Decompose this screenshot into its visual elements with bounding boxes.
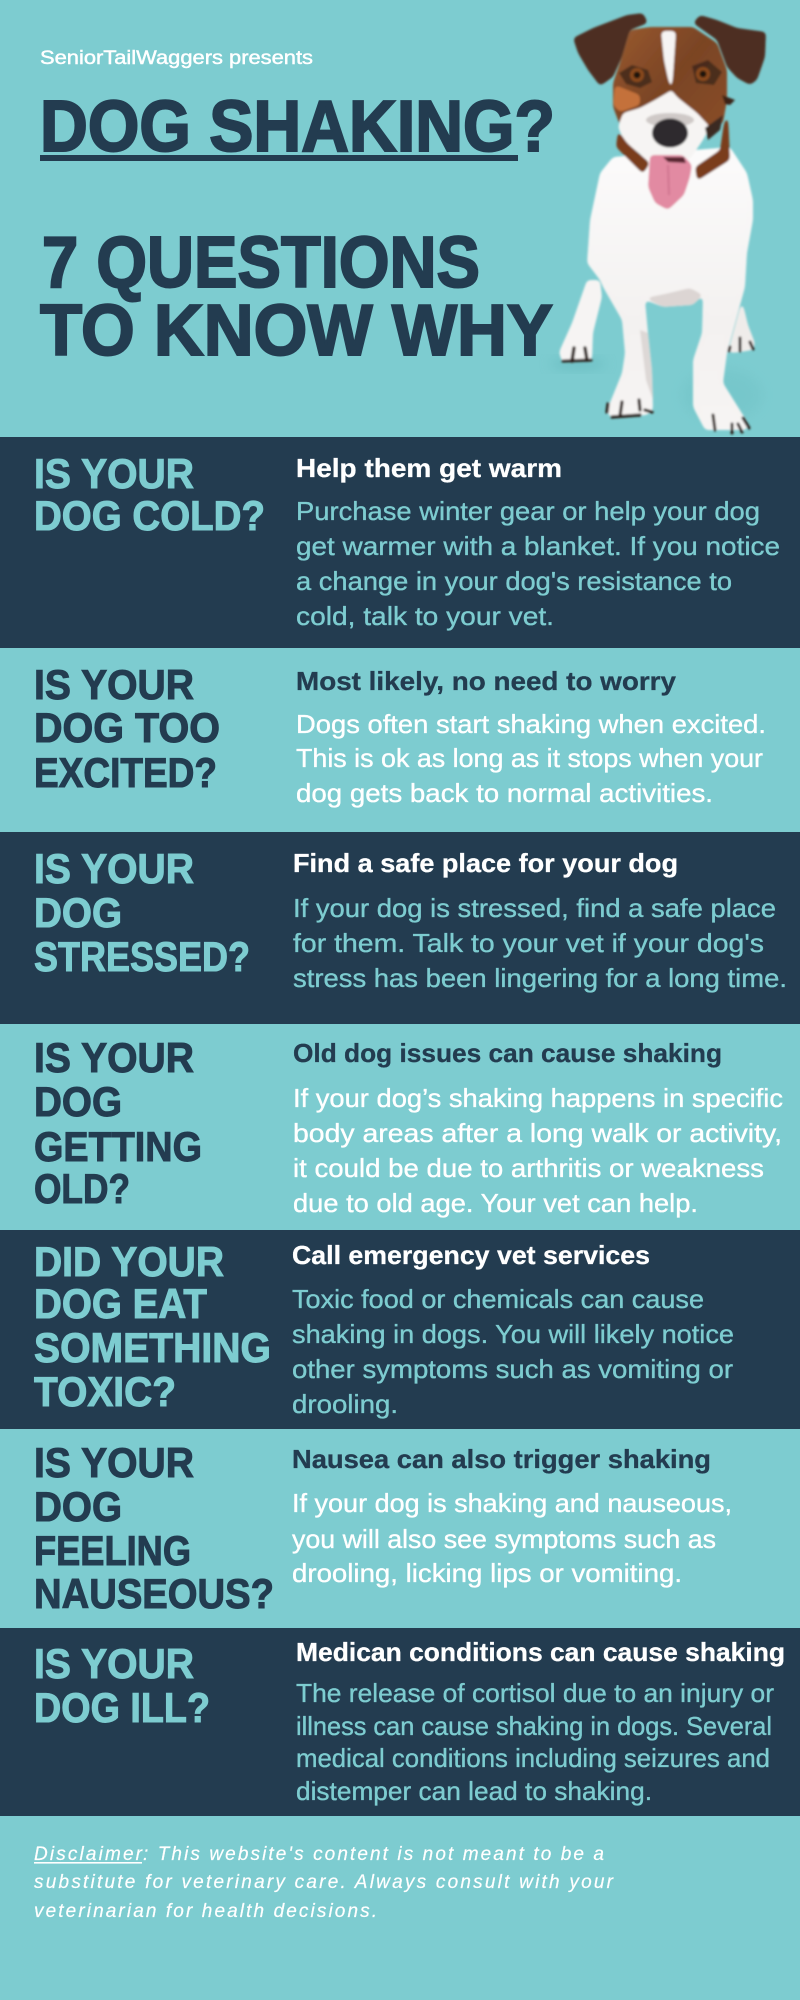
heading: find a safe place: Find a safe place for your dog bbox=[293, 848, 678, 878]
body text: excitement advice: Dogs often start shaking when excited. bbox=[296, 709, 766, 739]
body text: stress advice: If your dog is stressed, find a safe place bbox=[293, 893, 776, 923]
question: is your dog getting old bbox=[34, 1034, 202, 1212]
heading: help them get warm: Help them get warm bbox=[296, 453, 562, 483]
body text: nausea advice: If your dog is shaking and nauseous, bbox=[292, 1488, 732, 1518]
question: is your dog cold: IS YOUR bbox=[34, 450, 194, 497]
body text: toxic food advice bbox=[292, 1284, 734, 1419]
panel: is your dog feeling nauseous bbox=[0, 1429, 800, 1628]
question: is your dog cold bbox=[34, 450, 265, 539]
question: is your dog getting old: IS YOUR bbox=[34, 1034, 194, 1081]
body text: cold advice: Purchase winter gear or help your dog bbox=[296, 496, 760, 526]
heading: most likely no need to worry: Most likely, no need to worry bbox=[296, 666, 677, 696]
question: is your dog too excited: IS YOUR bbox=[34, 661, 194, 708]
question: is your dog feeling nauseous: NAUSEOUS? bbox=[34, 1570, 274, 1617]
body text: illness advice: medical conditions including seizures and bbox=[296, 1743, 770, 1773]
heading: call emergency vet services: Call emergency vet services bbox=[292, 1240, 650, 1270]
panel: did your dog eat something toxic bbox=[0, 1230, 800, 1429]
body text: illness advice: The release of cortisol due to an injury or bbox=[296, 1678, 774, 1708]
question: is your dog getting old: DOG bbox=[34, 1078, 122, 1125]
body text: illness advice: distemper can lead to shaking. bbox=[296, 1776, 652, 1806]
disclaimer: : This website's content is not meant to be a bbox=[143, 1844, 604, 1865]
body text: excitement advice: dog gets back to normal activities. bbox=[296, 778, 713, 808]
body text: cold advice: a change in your dog's resistance to bbox=[296, 566, 732, 596]
body text: excitement advice: This is ok as long as it stops when your bbox=[296, 743, 763, 773]
body text: toxic food advice: other symptoms such as vomiting or bbox=[292, 1354, 733, 1384]
question: is your dog cold: DOG COLD? bbox=[34, 492, 265, 539]
question: is your dog stressed: IS YOUR bbox=[34, 845, 194, 892]
disclaimer bbox=[34, 1844, 614, 1922]
subtitle: 7 questions to know why: TO KNOW WHY bbox=[40, 291, 553, 371]
panel: is your dog stressed bbox=[0, 832, 800, 1024]
question: is your dog getting old: OLD? bbox=[34, 1165, 130, 1212]
body text: old age advice: due to old age. Your vet can help. bbox=[293, 1188, 698, 1218]
body text: old age advice: it could be due to arthritis or weakness bbox=[293, 1153, 764, 1183]
disclaimer: Disclaimer bbox=[34, 1844, 143, 1865]
question: is your dog too excited: DOG TOO bbox=[34, 704, 220, 751]
subtitle: 7 questions to know why: 7 QUESTIONS bbox=[42, 223, 480, 303]
question: did your dog eat something toxic: TOXIC? bbox=[34, 1368, 176, 1415]
question: is your dog too excited: EXCITED? bbox=[34, 749, 217, 796]
question: is your dog too excited bbox=[34, 661, 220, 796]
question: did your dog eat something toxic: SOMETHING bbox=[34, 1324, 271, 1371]
disclaimer: veterinarian for health decisions. bbox=[34, 1901, 377, 1922]
title: dog shaking: DOG SHAKING? bbox=[40, 87, 555, 167]
question: is your dog ill: DOG ILL? bbox=[34, 1684, 210, 1731]
body text: stress advice: for them. Talk to your vet if your dog's bbox=[293, 928, 764, 958]
question: did your dog eat something toxic bbox=[34, 1238, 271, 1415]
body text: nausea advice: you will also see symptoms such as bbox=[292, 1524, 716, 1554]
heading: nausea can also trigger shaking: Nausea can also trigger shaking bbox=[292, 1444, 711, 1474]
subtitle: 7 questions to know why bbox=[40, 223, 553, 371]
question: did your dog eat something toxic: DID YOUR bbox=[34, 1238, 224, 1285]
panel: is your dog too excited bbox=[0, 648, 800, 832]
body text: stress advice: stress has been lingering for a long time. bbox=[293, 963, 787, 993]
question: is your dog stressed bbox=[34, 845, 250, 980]
body text: excitement advice bbox=[296, 709, 766, 808]
body text: old age advice: body areas after a long walk or activity, bbox=[293, 1118, 782, 1148]
question: is your dog feeling nauseous: IS YOUR bbox=[34, 1439, 194, 1486]
body text: stress advice bbox=[293, 893, 787, 993]
body text: old age advice: If your dog’s shaking happens in specific bbox=[293, 1083, 783, 1113]
question: did your dog eat something toxic: DOG EAT bbox=[34, 1280, 207, 1327]
question: is your dog ill bbox=[34, 1640, 210, 1731]
body text: nausea advice: drooling, licking lips or vomiting. bbox=[292, 1558, 682, 1588]
heading: medical conditions: Medican conditions can cause shaking bbox=[296, 1637, 785, 1667]
body text: toxic food advice: shaking in dogs. You will likely notice bbox=[292, 1319, 734, 1349]
body text: cold advice: cold, talk to your vet. bbox=[296, 601, 554, 631]
body text: toxic food advice: Toxic food or chemicals can cause bbox=[292, 1284, 704, 1314]
presenter line: SeniorTailWaggers presents bbox=[40, 48, 313, 69]
question: is your dog ill: IS YOUR bbox=[34, 1640, 194, 1687]
panel: is your dog cold bbox=[0, 437, 800, 648]
heading: old dog issues: Old dog issues can cause shaking bbox=[293, 1038, 722, 1068]
panel: is your dog getting old bbox=[0, 1024, 800, 1230]
body text: toxic food advice: drooling. bbox=[292, 1389, 398, 1419]
question: is your dog feeling nauseous: FEELING bbox=[34, 1527, 191, 1574]
question: is your dog feeling nauseous bbox=[34, 1439, 274, 1617]
question: is your dog feeling nauseous: DOG bbox=[34, 1483, 122, 1530]
icon: jack russell terrier dog bbox=[550, 13, 766, 433]
body text: old age advice bbox=[293, 1083, 783, 1218]
body text: illness advice: illness can cause shaking in dogs. Several bbox=[296, 1711, 772, 1741]
body text: illness advice bbox=[296, 1678, 774, 1806]
question: is your dog stressed: STRESSED? bbox=[34, 933, 250, 980]
body text: cold advice: get warmer with a blanket. If you notice bbox=[296, 531, 780, 561]
body text: cold advice bbox=[296, 496, 780, 631]
body text: nausea advice bbox=[292, 1488, 732, 1588]
panel: is your dog ill bbox=[0, 1628, 800, 1816]
question: is your dog stressed: DOG bbox=[34, 889, 122, 936]
question: is your dog getting old: GETTING bbox=[34, 1123, 202, 1170]
disclaimer: substitute for veterinary care. Always consult with your bbox=[34, 1872, 614, 1893]
